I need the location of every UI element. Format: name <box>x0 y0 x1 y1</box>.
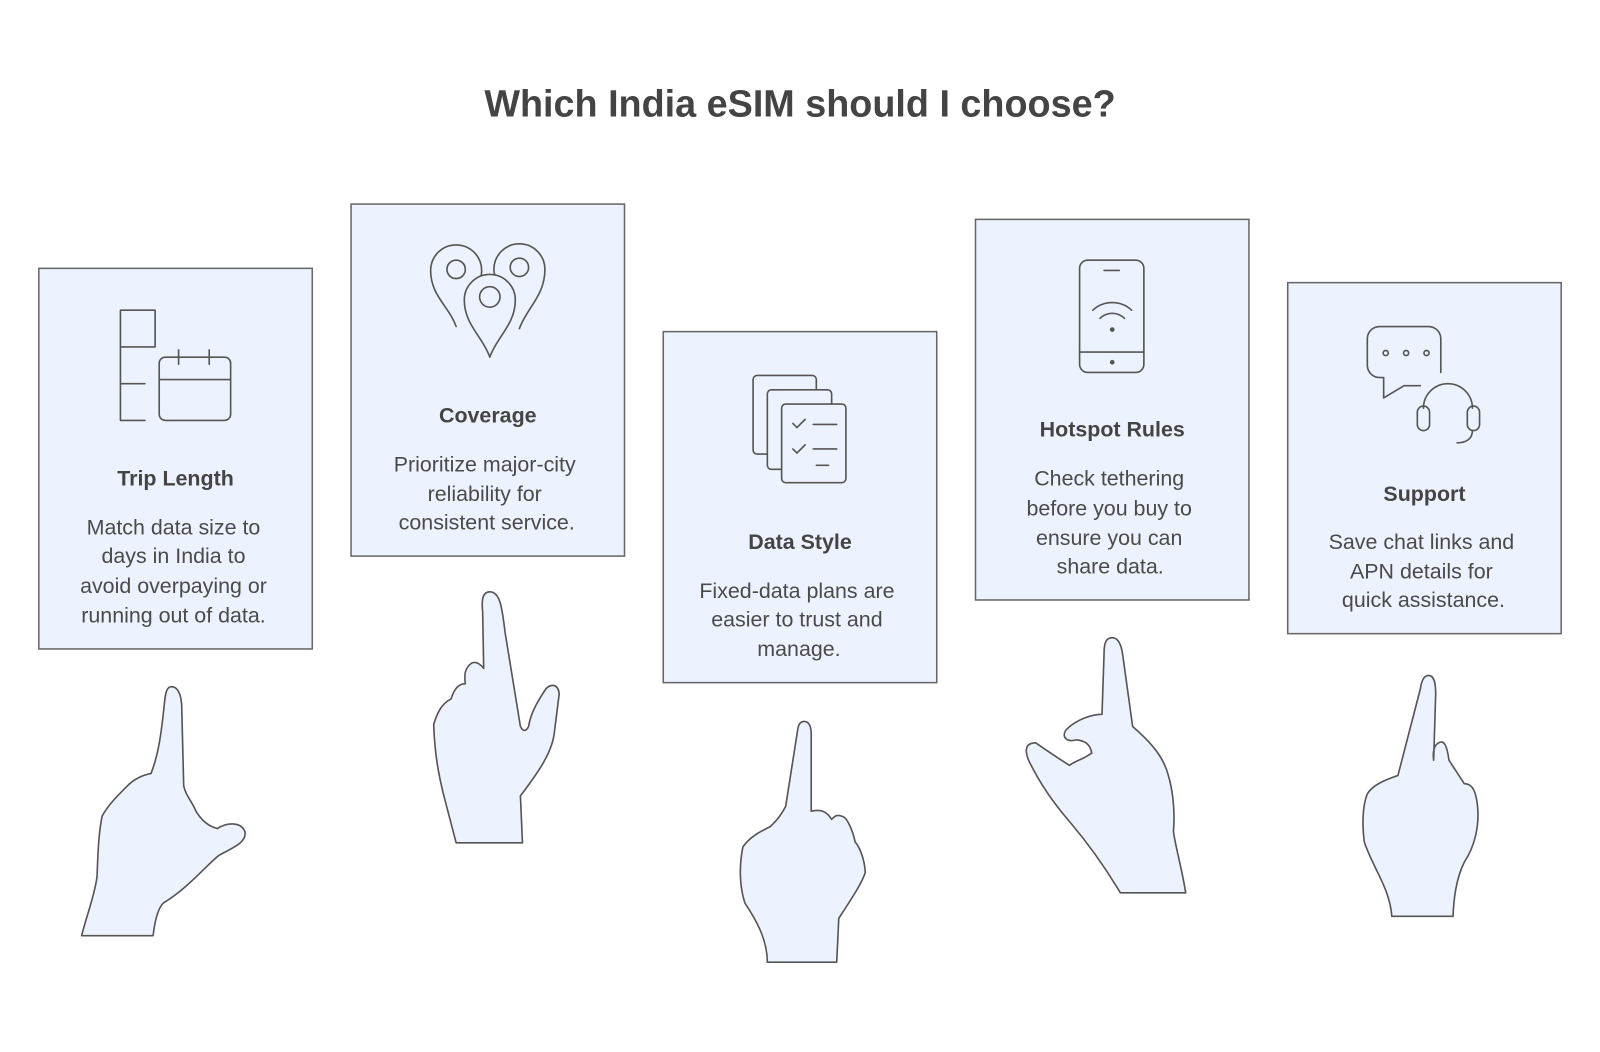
text: trip length: running out of data. <box>81 603 266 627</box>
heading: trip length: Trip Length <box>117 467 234 491</box>
icon: documents checklist <box>753 375 846 483</box>
panel: coverage <box>351 204 624 556</box>
text: data style <box>699 579 895 661</box>
text: hotspot rules: ensure you can <box>1036 526 1182 550</box>
text: data style: manage. <box>757 637 841 661</box>
heading: data style: Data Style <box>748 530 852 554</box>
title: Which India eSIM should I choose? <box>484 82 1116 124</box>
text: data style: Fixed-data plans are <box>699 579 895 603</box>
icon: map pins <box>431 244 545 357</box>
icon: hand 1 <box>82 687 245 936</box>
heading: support: Support <box>1383 482 1465 506</box>
text: hotspot rules: share data. <box>1057 554 1164 578</box>
text: coverage: Prioritize major-city <box>394 452 576 476</box>
panel: trip length <box>39 268 312 649</box>
text: hotspot rules <box>1026 467 1192 578</box>
text: coverage: reliability for <box>428 482 542 506</box>
text: support: APN details for <box>1350 560 1493 584</box>
text: hotspot rules: before you buy to <box>1026 496 1192 520</box>
text: data style: easier to trust and <box>711 608 883 632</box>
text: support: Save chat links and <box>1329 530 1514 554</box>
text: hotspot rules: Check tethering <box>1034 467 1184 491</box>
panel: data style <box>663 332 937 683</box>
heading: hotspot rules: Hotspot Rules <box>1040 418 1185 442</box>
panel: support <box>1288 283 1561 634</box>
text: coverage: consistent service. <box>399 511 575 535</box>
panel: hotspot rules <box>976 219 1249 600</box>
icon: hand 5 <box>1363 675 1478 916</box>
icon: chat and headset <box>1367 327 1480 443</box>
text: trip length: avoid overpaying or <box>80 574 267 598</box>
text: trip length: Match data size to <box>87 516 260 540</box>
text: trip length <box>80 516 267 627</box>
icon: hand 3 <box>740 721 865 962</box>
text: trip length: days in India to <box>101 544 245 568</box>
icon: hand 4 <box>1026 638 1186 893</box>
icon: calendar <box>120 310 231 420</box>
text: support: quick assistance. <box>1342 588 1505 612</box>
text: coverage <box>394 452 576 535</box>
heading: coverage: Coverage <box>439 403 537 427</box>
icon: phone wifi <box>1080 260 1144 372</box>
text: support <box>1329 530 1514 612</box>
icon: hand 2 <box>434 592 559 843</box>
